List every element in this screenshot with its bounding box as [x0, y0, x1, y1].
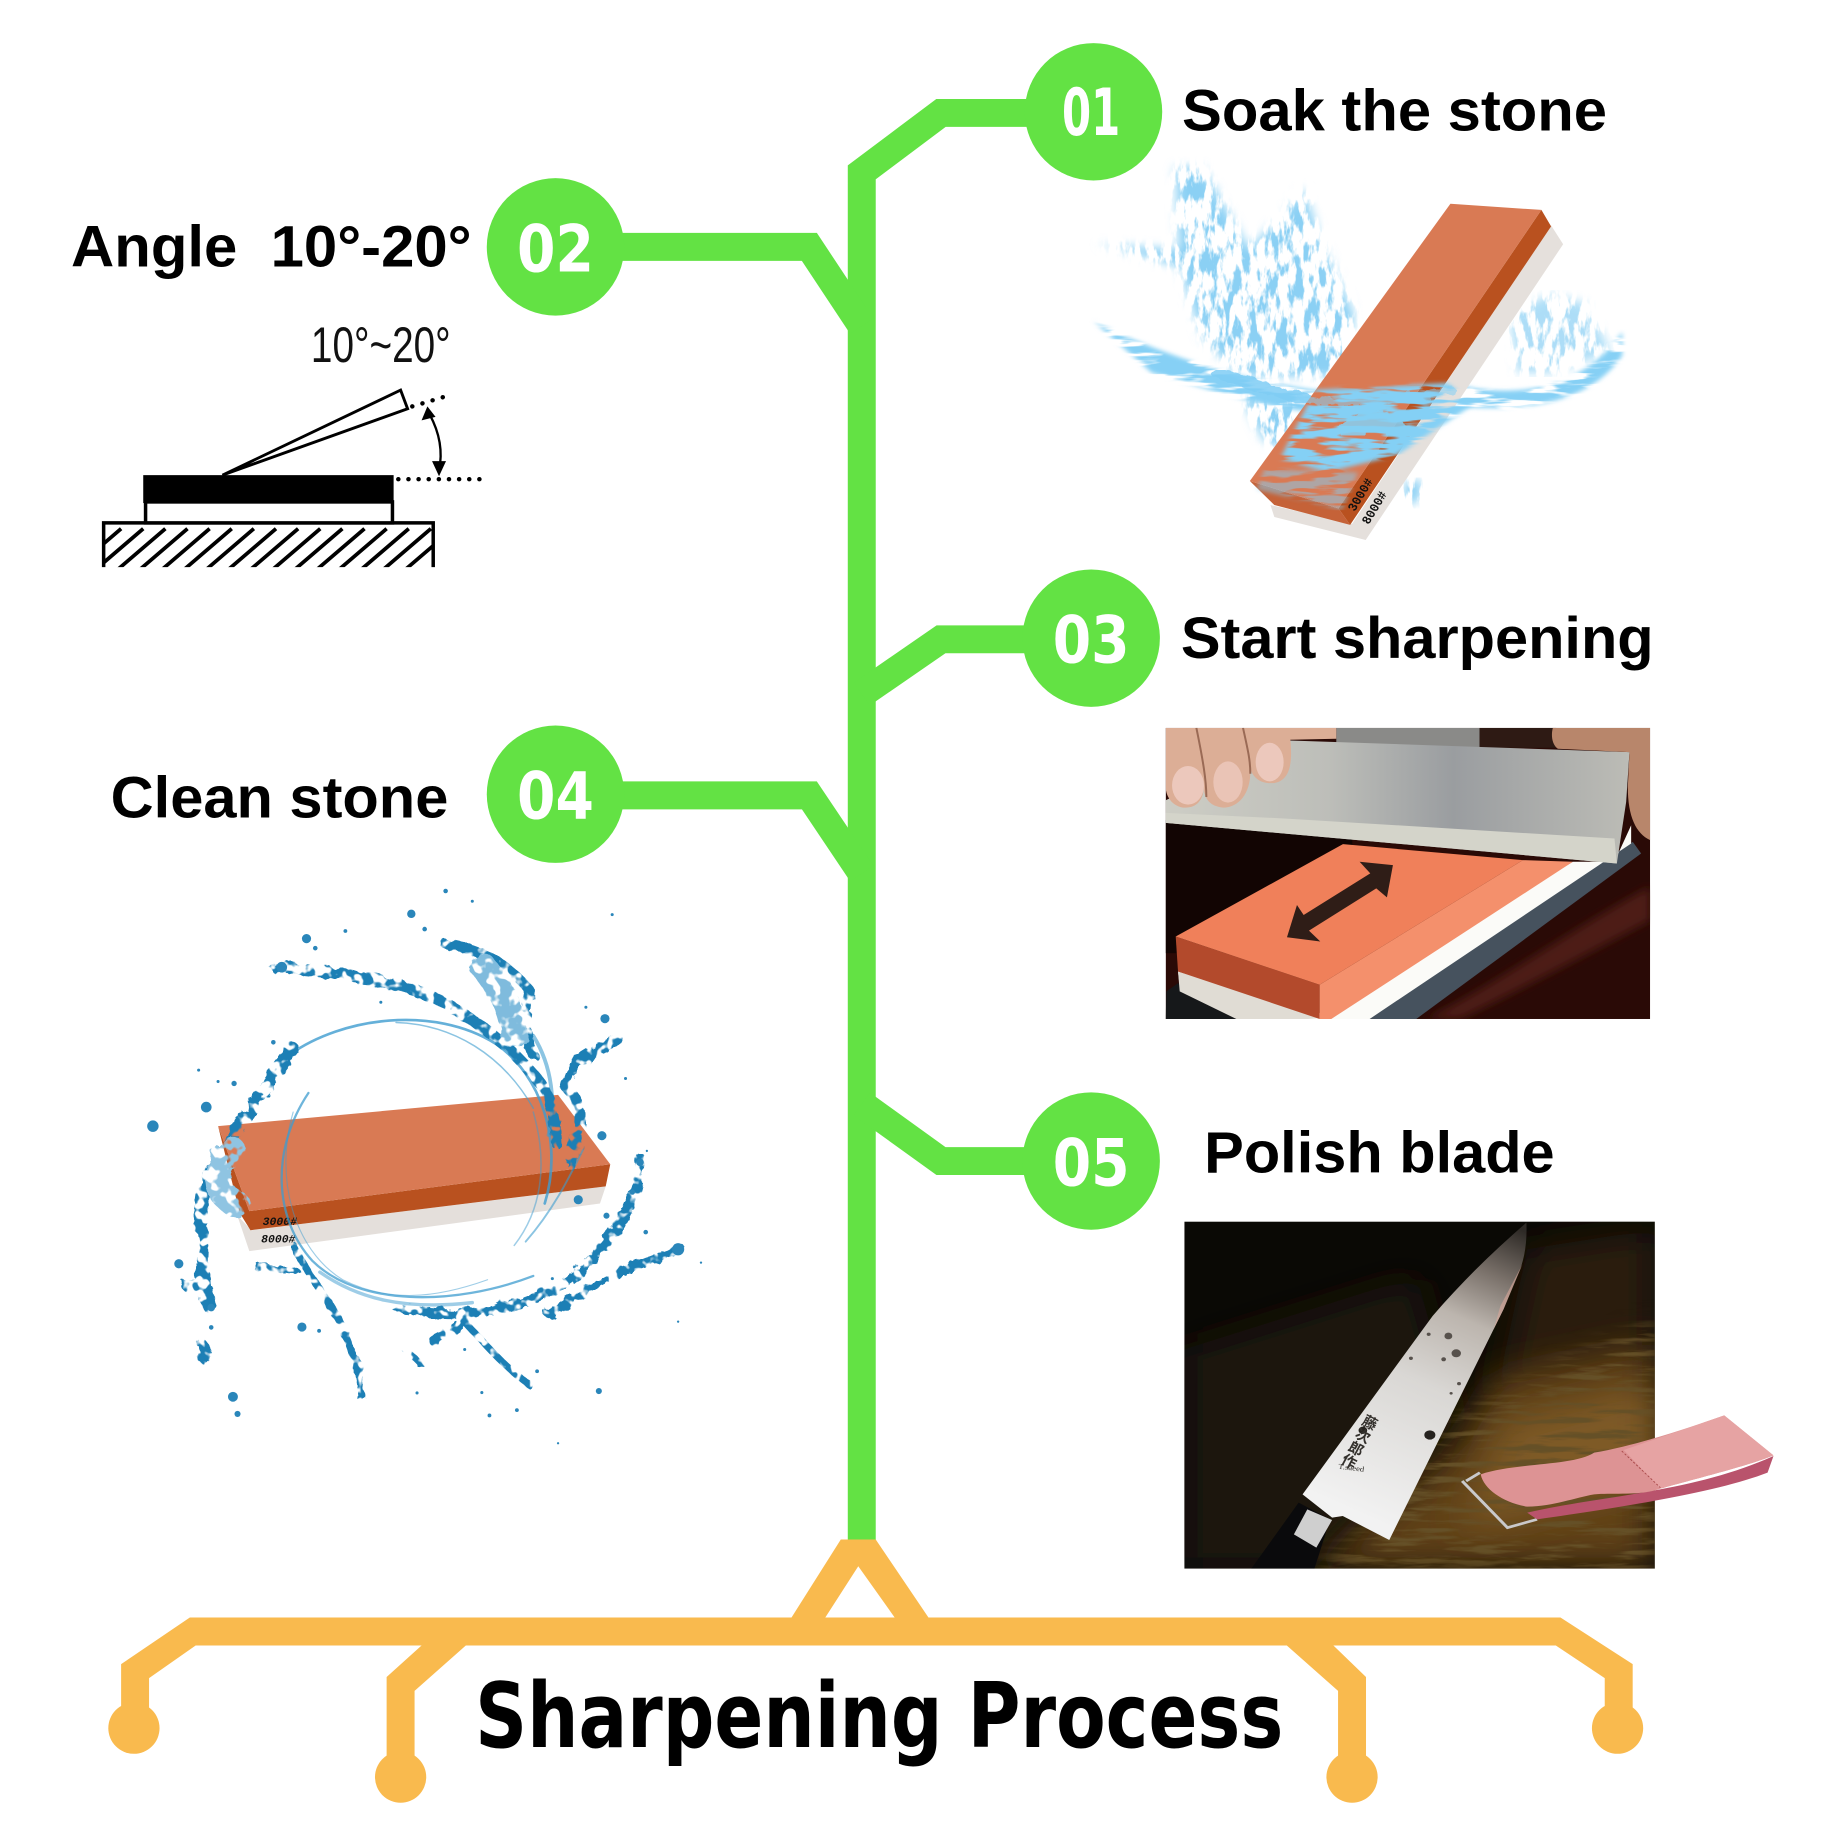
step 02 badge: [487, 178, 624, 316]
stone front face: [1250, 481, 1350, 525]
step 02 badge: 02: [517, 211, 594, 287]
step 04 heading: Clean stone: [111, 766, 448, 831]
stone side face: [1320, 860, 1573, 1019]
stone grit labels: 3000#: [1345, 476, 1377, 514]
step 03 heading: Start sharpening: [1181, 606, 1654, 671]
knife blade: [1303, 1223, 1527, 1540]
stone top face: [218, 1095, 610, 1211]
water wave over stone: [1257, 383, 1475, 510]
angle arrow: [430, 415, 441, 470]
dotted reference lines: [398, 477, 480, 481]
stone front face: [218, 1126, 610, 1230]
kanji mark on blade: 藤次郎作: [1336, 1411, 1383, 1474]
step 01 badge: 01: [1062, 75, 1120, 151]
illustration: stone in water ring: [147, 889, 702, 1444]
knife bolster: [1294, 1509, 1332, 1548]
step 03 badge: 03: [1053, 603, 1130, 679]
title: Sharpening Process: [475, 1665, 1283, 1769]
step 01 badge: [1025, 43, 1162, 181]
step 02 heading: Angle 10°-20°: [71, 215, 472, 280]
strop metal ring: [1462, 1473, 1537, 1528]
water ring: [282, 1020, 583, 1305]
apex: [791, 1540, 929, 1619]
stone side face: [1338, 210, 1551, 525]
step 01 heading: Soak the stone: [1182, 78, 1607, 143]
stone grit labels: [1345, 476, 1391, 527]
base holder: [1166, 983, 1243, 1019]
hatched base: [102, 521, 435, 568]
leather strop: [1462, 1415, 1773, 1528]
photo: knife on wooden board: [1184, 1222, 1773, 1569]
step 04 badge: 04: [517, 759, 594, 835]
step 05 badge: [1022, 1092, 1160, 1230]
right hand: [1552, 728, 1650, 840]
stone top face: [1250, 204, 1541, 508]
main band: [121, 1618, 1633, 1758]
illustration: stone soaking in water splash: [1094, 167, 1622, 540]
angle label: 10°~20°: [311, 317, 451, 373]
step 03 badge: [1022, 569, 1160, 707]
wood grain: [1317, 1320, 1655, 1569]
stone white layer: [237, 1186, 606, 1251]
step 04 badge: [487, 726, 624, 863]
knife handle: [1251, 1503, 1330, 1569]
water wave bands: [1094, 321, 1622, 411]
green trunk and branches: [617, 113, 1036, 1541]
stone grit labels: 8000#: [1359, 489, 1391, 527]
white stone layer: [1178, 825, 1631, 1019]
stone grit labels: 8000#: [261, 1233, 296, 1246]
photo: sharpening blade on stone: [1166, 728, 1650, 1019]
double arrow: [1287, 862, 1393, 942]
stone front face: [1176, 937, 1320, 1019]
stone grit labels: 3000#: [263, 1216, 297, 1229]
step 05 heading: Polish blade: [1204, 1121, 1555, 1186]
water splash behind stone: [1097, 167, 1611, 507]
illustration: blade angle diagram: [102, 327, 482, 568]
left fingers: [1166, 728, 1336, 808]
orange title bracket: [108, 1540, 1643, 1803]
water tendrils: [186, 944, 682, 1398]
strop leather: [1481, 1415, 1773, 1507]
stone white layer: [1270, 225, 1563, 540]
blade: [1166, 740, 1629, 863]
stone top face: [1176, 844, 1523, 985]
water drops on blade: [1359, 1333, 1461, 1440]
blade wedge: [222, 390, 408, 475]
strop back loop: [1527, 1456, 1773, 1519]
brand mark: T.saeed: [1338, 1462, 1365, 1474]
water droplets: [147, 889, 702, 1444]
stone block: [143, 475, 394, 503]
connector dots: [108, 1703, 160, 1754]
wood background: [1184, 1222, 1655, 1569]
stone grit labels: [261, 1216, 297, 1246]
photo background: [1166, 728, 1650, 1019]
step 05 badge: 05: [1053, 1126, 1130, 1202]
